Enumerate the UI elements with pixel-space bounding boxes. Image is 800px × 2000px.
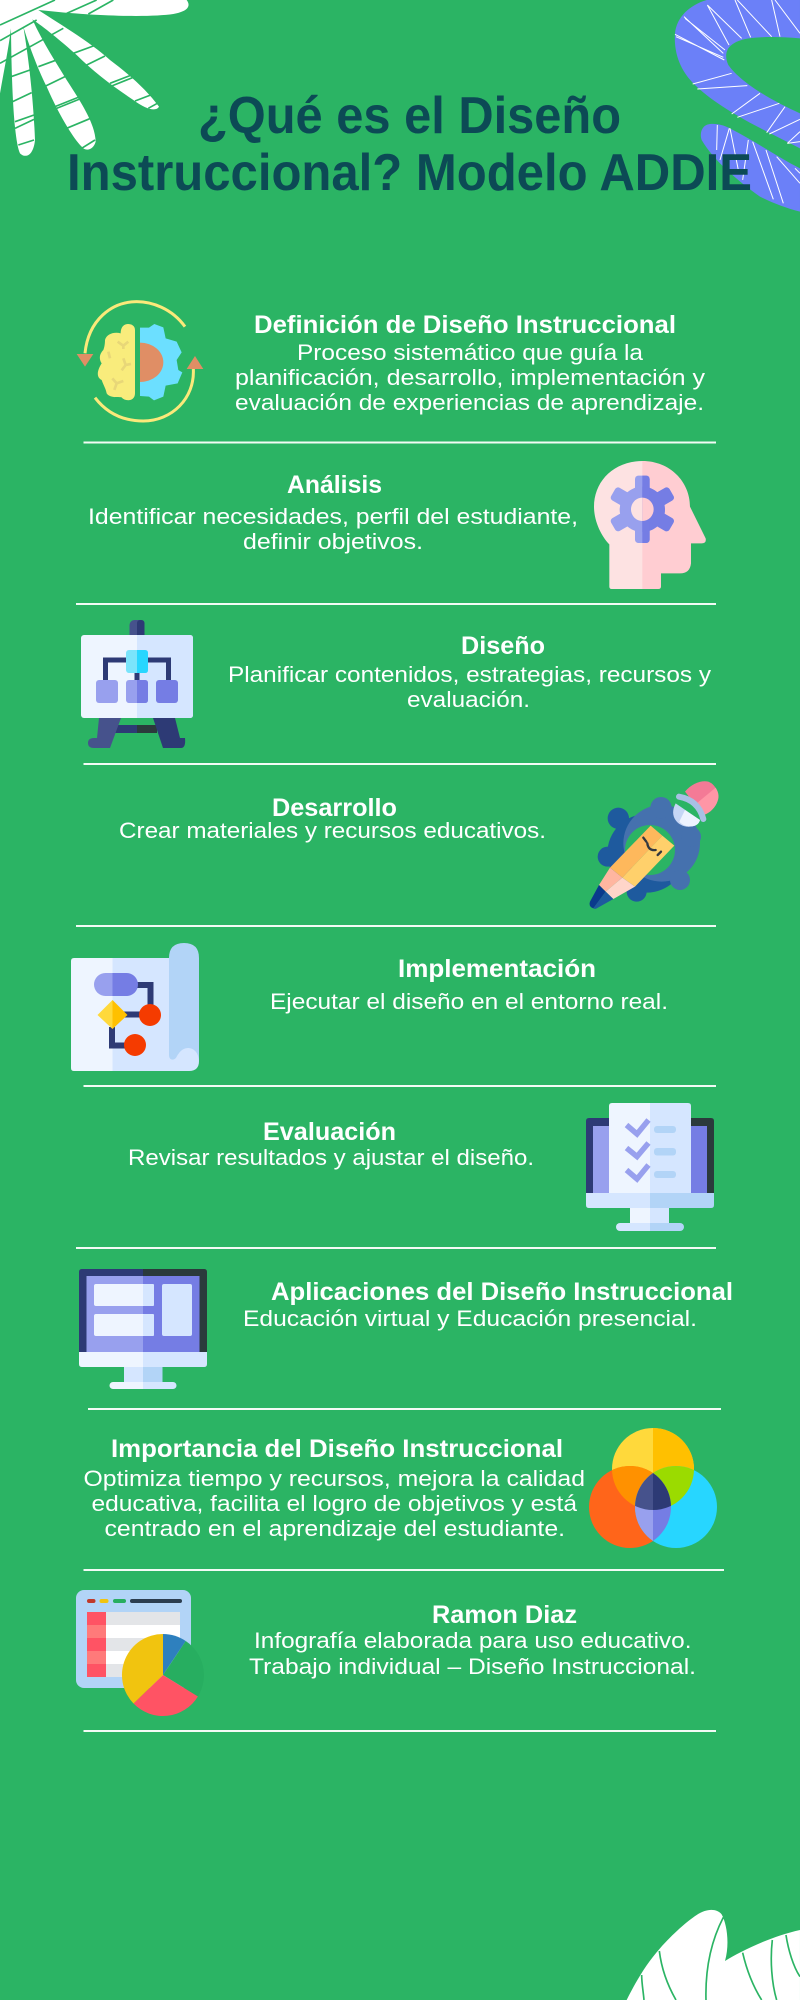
text: importancia xyxy=(84,1466,585,1541)
decoration: blue swirl top right xyxy=(675,0,800,212)
icon: head with gear xyxy=(594,461,706,589)
icon: monitor with checklist xyxy=(586,1103,714,1231)
text: importancia: Optimiza tiempo y recursos, mejora la calidad xyxy=(84,1466,585,1491)
panel: evaluación xyxy=(128,1103,714,1231)
text: importancia: centrado en el aprendizaje del estudiante. xyxy=(104,1516,565,1541)
panel: definición xyxy=(77,302,705,421)
heading: diseño: Diseño xyxy=(461,632,545,660)
title: ¿Qué es el Diseño xyxy=(198,87,621,145)
heading: evaluación: Evaluación xyxy=(263,1118,396,1146)
text: autor: Trabajo individual – Diseño Instruccional. xyxy=(249,1654,696,1679)
text: evaluación: Revisar resultados y ajustar el diseño. xyxy=(128,1145,534,1170)
panel: análisis xyxy=(88,461,706,589)
text: importancia: educativa, facilita el logro de objetivos y está xyxy=(92,1491,578,1516)
icon: venn diagram xyxy=(589,1428,717,1560)
text: definición xyxy=(235,340,705,415)
panel: autor xyxy=(76,1590,696,1716)
text: análisis: Identificar necesidades, perfil del estudiante, xyxy=(88,504,578,529)
decoration: white leaves top left xyxy=(0,0,189,156)
text: autor: Infografía elaborada para uso educativo. xyxy=(254,1628,692,1653)
text: análisis xyxy=(88,504,578,554)
heading: definición: Definición de Diseño Instruccional xyxy=(254,311,676,339)
icon: flowchart scroll xyxy=(71,943,199,1071)
icon: desktop monitor xyxy=(79,1269,207,1389)
panel: importancia xyxy=(84,1428,717,1560)
heading: autor: Ramon Diaz xyxy=(432,1601,577,1629)
icon: easel with chart xyxy=(81,620,193,748)
heading: aplicaciones: Aplicaciones del Diseño Instruccional xyxy=(271,1278,733,1306)
text: diseño xyxy=(228,662,711,712)
text: autor xyxy=(249,1628,696,1679)
text: definición: Proceso sistemático que guía la xyxy=(297,340,644,365)
panel: implementación xyxy=(71,943,668,1071)
icon: brain and gear xyxy=(77,302,203,421)
text: análisis: definir objetivos. xyxy=(243,529,423,554)
decoration: white leaf bottom right xyxy=(627,1910,800,2000)
panel: aplicaciones xyxy=(79,1269,733,1389)
text: definición: planificación, desarrollo, implementación y xyxy=(235,365,705,390)
panel: desarrollo xyxy=(119,781,719,909)
text: definición: evaluación de experiencias de aprendizaje. xyxy=(235,390,704,415)
heading: desarrollo: Desarrollo xyxy=(272,794,397,822)
heading: implementación: Implementación xyxy=(398,955,596,983)
panel: diseño xyxy=(81,620,711,748)
icon: pencil and gear xyxy=(590,781,719,909)
text: desarrollo: Crear materiales y recursos educativos. xyxy=(119,818,546,843)
text: diseño: Planificar contenidos, estrategias, recursos y xyxy=(228,662,711,687)
text: diseño: evaluación. xyxy=(407,687,530,712)
heading: análisis: Análisis xyxy=(287,471,382,499)
title: Instruccional? Modelo ADDIE xyxy=(67,144,752,202)
heading: importancia: Importancia del Diseño Instruccional xyxy=(111,1435,563,1463)
icon: spreadsheet window with pie chart xyxy=(76,1590,204,1716)
text: implementación: Ejecutar el diseño en el entorno real. xyxy=(270,989,668,1014)
text: aplicaciones: Educación virtual y Educación presencial. xyxy=(243,1306,697,1331)
title xyxy=(67,87,752,202)
